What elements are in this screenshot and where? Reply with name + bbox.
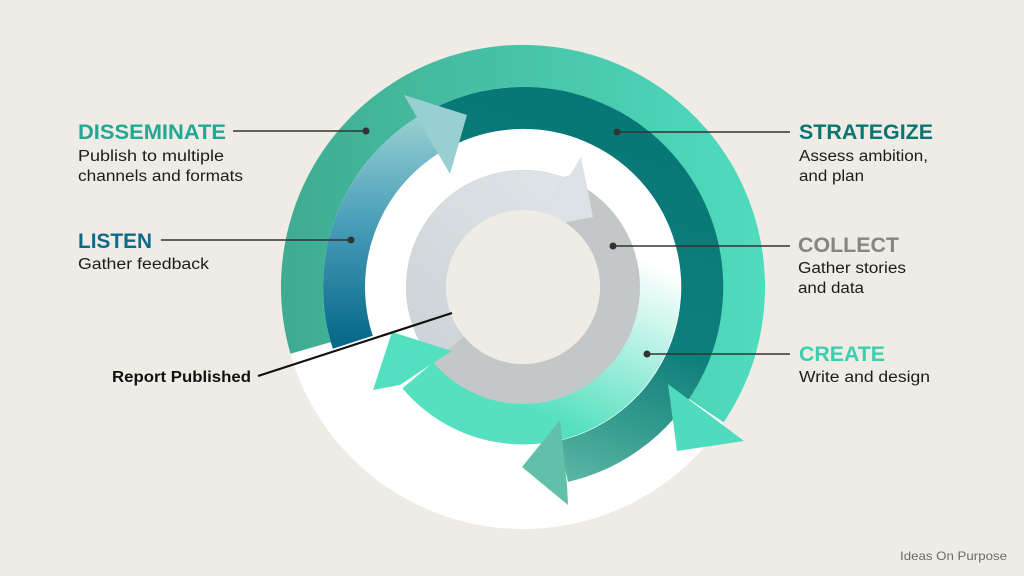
label: disseminate: DISSEMINATE [78, 121, 226, 144]
label: strategize: STRATEGIZE [799, 121, 933, 144]
outer green arc: disseminate [302, 66, 744, 411]
white disk [281, 45, 765, 529]
label: disseminate: Publish to multiple [78, 148, 224, 165]
label: create [799, 343, 930, 386]
label: strategize: Assess ambition, [799, 148, 928, 165]
report published line [258, 313, 452, 376]
label: strategize: and plan [799, 168, 864, 185]
label: collect: and data [798, 280, 864, 297]
teal arrowhead [522, 420, 568, 505]
teal arc: strategize [447, 108, 702, 461]
label: disseminate [78, 121, 243, 185]
blue arc: listen [344, 135, 428, 342]
inner beige circle [446, 210, 600, 364]
label: disseminate: channels and formats [78, 168, 243, 185]
label: collect: COLLECT [798, 234, 899, 257]
label: listen: Gather feedback [78, 256, 209, 273]
credit: Ideas On Purpose [900, 549, 1007, 563]
mint arc: create [418, 252, 660, 424]
mint arrowhead [373, 332, 452, 390]
label: create: CREATE [799, 343, 885, 366]
blue arrowhead [404, 95, 467, 174]
grey ring: collect [426, 157, 620, 384]
label: strategize [799, 121, 933, 185]
label: report published: Report Published [112, 369, 251, 386]
label: listen [78, 230, 209, 273]
diagram: cycle rings [281, 45, 765, 529]
label: listen: LISTEN [78, 230, 152, 253]
label: collect [798, 234, 906, 297]
label: collect: Gather stories [798, 260, 906, 277]
leader lines [161, 128, 790, 358]
label: create: Write and design [799, 369, 930, 386]
outer green arrowhead [668, 384, 744, 451]
